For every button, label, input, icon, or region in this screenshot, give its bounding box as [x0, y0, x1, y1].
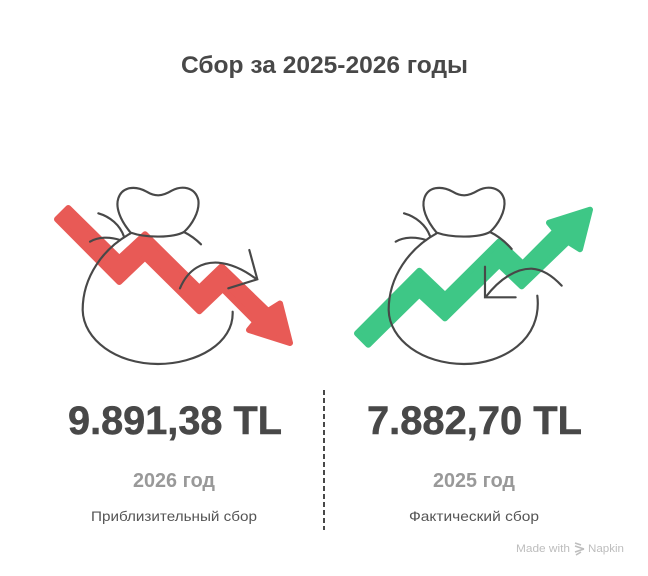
title: Сбор за 2025-2026 годы [181, 52, 468, 79]
value: 2025: 7.882,70 TL [367, 399, 582, 443]
icon: napkin logo [575, 543, 584, 555]
icon: money bag outline [389, 188, 562, 364]
panel: 2026 [57, 188, 290, 524]
watermark: Napkin [588, 543, 624, 555]
divider [323, 390, 325, 530]
watermark [516, 543, 624, 555]
watermark: Made with [516, 543, 570, 555]
icon: green rising arrow [357, 210, 590, 345]
icon: money bag outline [83, 188, 257, 364]
caption: 2026: Приблизительный сбор [91, 508, 257, 524]
year: 2026: 2026 год [133, 470, 215, 492]
value: 2026: 9.891,38 TL [68, 399, 282, 443]
caption: 2025: Фактический сбор [409, 508, 539, 524]
year: 2025: 2025 год [433, 470, 515, 492]
panel: 2025 [357, 188, 590, 524]
icon: red falling arrow [57, 208, 290, 343]
